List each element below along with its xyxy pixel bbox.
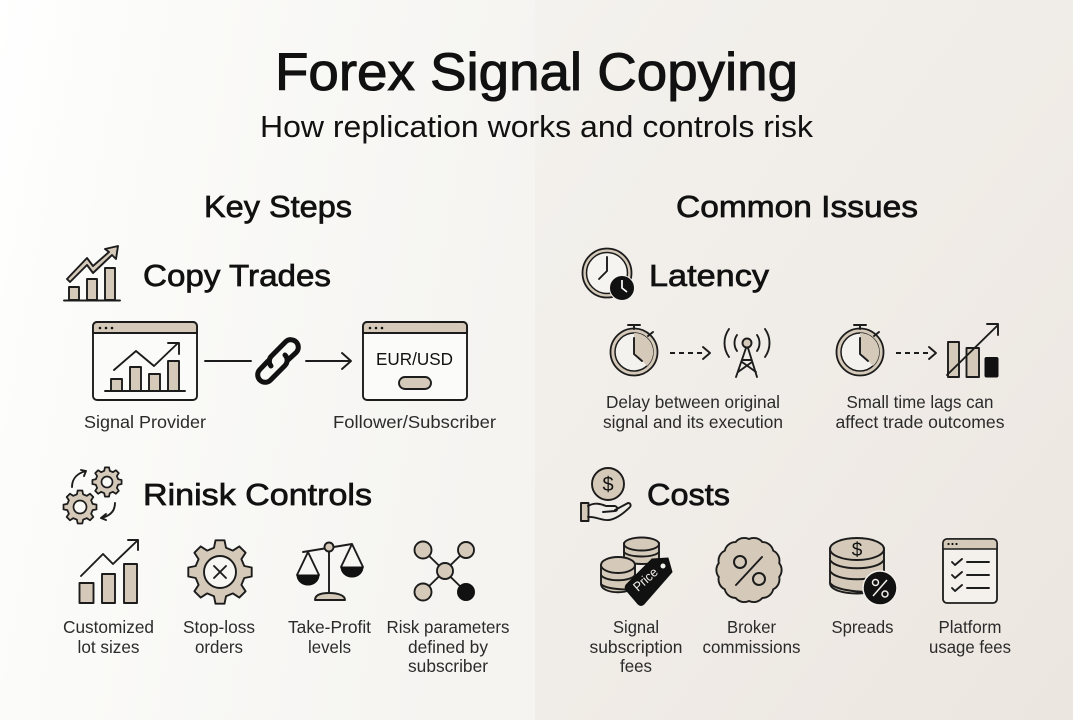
icon: bars with arrow: [947, 324, 998, 377]
icon: stopwatch: [610, 325, 658, 376]
arrow: [306, 353, 351, 369]
label: take-profit levels: levels: [308, 637, 351, 657]
label: spreads: Spreads: [832, 617, 894, 637]
label: risk parameters: Risk parameters: [386, 617, 510, 637]
icon: clock: [582, 248, 634, 300]
panel: costs: [581, 468, 1011, 676]
icon: network nodes: [414, 542, 474, 600]
label: delay: [603, 392, 783, 432]
icon: chain link: [258, 340, 298, 382]
label: time lags: [836, 392, 1005, 432]
icon: signal provider window: [93, 322, 197, 400]
background left panel: [0, 0, 535, 720]
label: follower: Follower/Subscriber: [333, 412, 496, 432]
panel: copy trades: [64, 246, 496, 432]
label: customized lot sizes: lot sizes: [78, 637, 140, 657]
label: signal subscription fees: subscription: [590, 637, 682, 657]
label: broker commissions: [702, 617, 801, 657]
heading: copy trades: Copy Trades: [143, 258, 331, 293]
label: take-profit levels: [288, 617, 371, 657]
label: stop-loss orders: Stop-loss: [183, 617, 255, 637]
panel: risk controls: [63, 467, 510, 676]
label: stop-loss orders: orders: [195, 637, 243, 657]
label: customized lot sizes: [63, 617, 154, 657]
label: time lags: affect trade outcomes: [836, 412, 1005, 432]
title: Forex Signal Copying: [275, 43, 798, 102]
label: time lags: Small time lags can: [846, 392, 994, 412]
heading: key steps: Key Steps: [204, 189, 352, 224]
icon: percent badge: [716, 538, 782, 602]
icon: coins with price tag: [601, 538, 672, 606]
label: broker commissions: Broker: [727, 617, 776, 637]
arrow: dashed: [670, 347, 710, 359]
background right panel: [535, 0, 1073, 720]
icon: follower window: [363, 322, 467, 400]
subtitle: How replication works and controls risk: [260, 109, 814, 144]
icon: stop-loss gear: [188, 540, 252, 604]
heading: common issues: Common Issues: [676, 189, 918, 224]
icon: growth chart: [64, 246, 120, 300]
icon: stopwatch 2: [836, 325, 884, 376]
icon: coin stack with percent: $: [852, 540, 863, 561]
label: signal subscription fees: Signal: [613, 617, 659, 637]
icon: gears: [64, 467, 122, 523]
icon: follower window: EUR/USD: [376, 349, 453, 369]
label: risk parameters: [386, 617, 510, 676]
icon: scales: [297, 542, 363, 600]
label: risk parameters: subscriber: [408, 656, 488, 676]
label: delay: Delay between original: [606, 392, 780, 412]
label: stop-loss orders: [183, 617, 255, 657]
label: platform usage fees: [929, 617, 1011, 657]
line connector: [205, 360, 251, 362]
heading: costs: Costs: [647, 477, 730, 512]
icon: coin over hand: $: [602, 474, 614, 496]
label: risk parameters: defined by: [408, 637, 488, 657]
icon: signal tower: [724, 329, 770, 377]
icon: coin stack with percent: [830, 538, 897, 605]
label: platform usage fees: usage fees: [929, 637, 1011, 657]
label: broker commissions: commissions: [702, 637, 801, 657]
label: delay: signal and its execution: [603, 412, 783, 432]
icon: platform checklist: [943, 539, 997, 603]
label: signal subscription fees: fees: [620, 656, 652, 676]
label: customized lot sizes: Customized: [63, 617, 154, 637]
icon: coin over hand: [581, 468, 631, 521]
panel: latency: [582, 248, 1005, 432]
icon: coins with price tag: Price: [630, 564, 661, 594]
heading: risk controls: Rinisk Controls: [143, 477, 372, 512]
arrow: dashed 2: [896, 347, 936, 359]
label: take-profit levels: Take-Profit: [288, 617, 371, 637]
label: platform usage fees: Platform: [938, 617, 1002, 637]
heading: latency: Latency: [649, 258, 770, 293]
icon: lot sizes: [80, 540, 138, 603]
label: signal subscription fees: [590, 617, 682, 676]
label: signal provider: Signal Provider: [84, 412, 206, 432]
